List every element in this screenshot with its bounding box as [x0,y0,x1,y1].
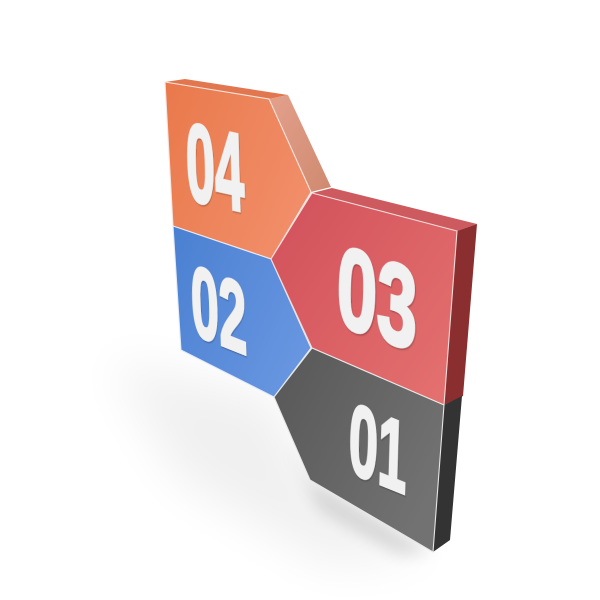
orange top side [165,79,288,99]
gray right side [433,396,462,552]
number 01: 01 [347,382,408,517]
panel: 04 orange segment [165,79,331,259]
orange front face [165,82,311,259]
red right side [444,224,477,405]
panel: 02 blue segment [173,226,311,397]
red front face [271,193,457,405]
orange right side [269,95,331,192]
number 03: 03 [335,220,419,375]
gray front face [274,348,444,552]
panel: 01 gray segment [274,348,462,552]
number 04: 04 [184,101,246,236]
panel: 03 red segment [271,188,477,405]
ground shadow [110,360,433,565]
red top side [312,188,477,231]
blue front face [173,226,311,397]
number 02: 02 [189,243,248,378]
